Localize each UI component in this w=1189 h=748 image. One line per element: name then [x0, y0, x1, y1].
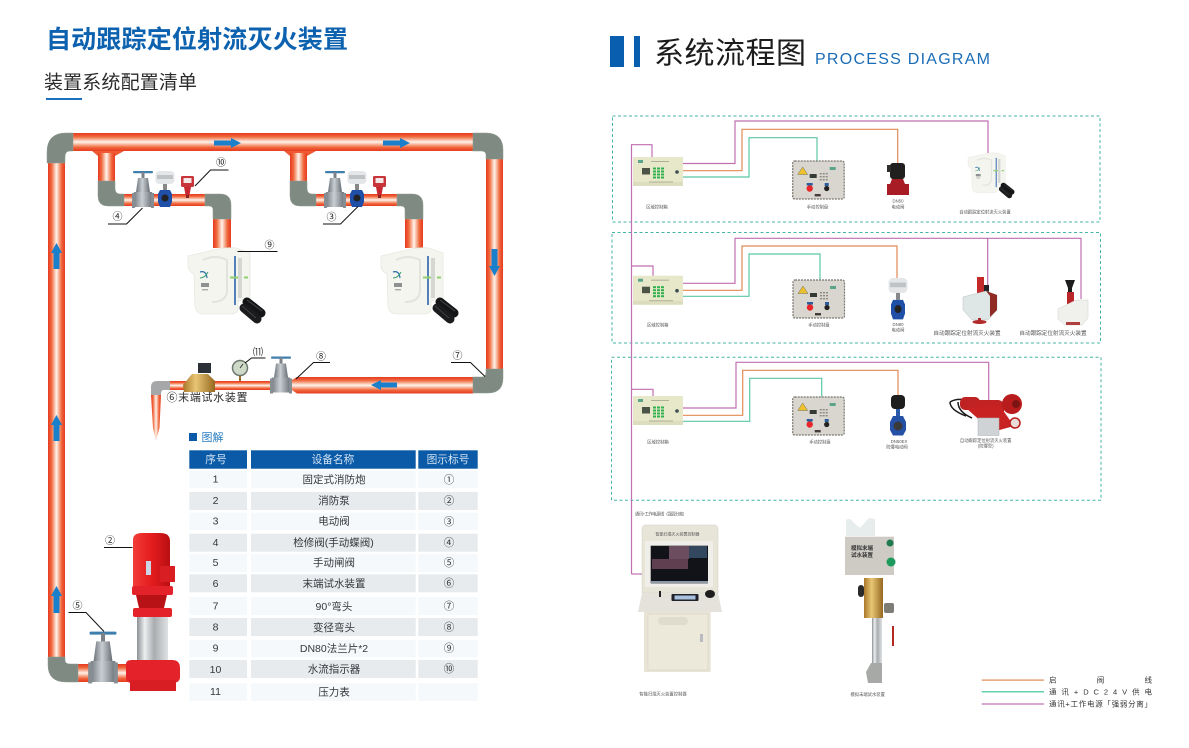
icon: DN50 electric valve	[887, 163, 909, 195]
row 6: 末端试水装置	[302, 577, 366, 590]
row 10: ⑩	[444, 663, 455, 675]
trunk line caption: 通讯+工作电源线（强弱分离）	[635, 510, 687, 518]
labels zone 3: 区域控制箱	[647, 438, 669, 446]
labels zone 2: 自动跟踪定位射流灭火装置	[933, 329, 1001, 337]
icon: manual control panel	[793, 280, 844, 318]
row 9: DN80法兰片*2	[300, 642, 368, 655]
labels zone 1: 手动控制盘	[807, 204, 829, 210]
wiring legend: 启阀线	[1049, 674, 1152, 684]
wiring legend: 通讯+DC24V供电	[1049, 686, 1152, 696]
row 5: 5	[213, 557, 219, 569]
row 1: 1	[213, 474, 219, 486]
leader lines and number labels: ⑤	[72, 600, 82, 612]
row 5: 手动闸阀	[313, 556, 355, 569]
row 11	[189, 683, 478, 701]
row 11: 压力表	[318, 686, 350, 698]
leader lines and number labels: ⑩	[216, 157, 226, 169]
labels zone 2: 手动控制盘	[808, 322, 830, 328]
row 4	[189, 534, 478, 552]
row 2: ②	[444, 495, 455, 507]
simulated end test water device	[845, 518, 896, 683]
icon: fire monitor left	[188, 248, 262, 319]
row 5	[189, 554, 478, 572]
labels zone 2: 自动跟踪定位射流灭火装置	[1019, 329, 1087, 337]
wiring zone 1	[683, 121, 988, 177]
labels zone 3: 手动控制盘	[809, 438, 831, 446]
row 7: 90°弯头	[316, 600, 352, 613]
icon: zone controller	[633, 396, 683, 425]
simulated end test water device: 模拟末端	[851, 544, 873, 552]
row 9: ⑨	[444, 642, 455, 654]
test device caption: 模拟末端试水装置	[851, 691, 886, 698]
wiring zone 3	[683, 362, 989, 421]
valve near pump	[88, 632, 118, 683]
row 2: 2	[213, 495, 219, 507]
heading: process diagram: PROCESS DIAGRAM	[815, 51, 990, 68]
main control cabinet: 智能扫描灭火装置控制器	[656, 530, 700, 536]
labels zone 3: (防爆型)	[978, 442, 994, 450]
icon: explosion-proof red monitor	[950, 394, 1022, 436]
row 4: 检修阀(手动蝶阀)	[293, 536, 374, 549]
pipe network diagram	[47, 133, 503, 691]
main pipe loop	[47, 133, 503, 682]
icon: zone controller	[633, 157, 683, 186]
leader lines and number labels: ④	[112, 211, 122, 223]
heading: process diagram	[610, 36, 990, 70]
branch with valves: left	[92, 151, 231, 248]
heading: process diagram: 系统流程图	[654, 38, 806, 70]
leader lines and number labels: ⑦	[452, 350, 462, 362]
leader lines and number labels: ⑥末端试水装置	[166, 390, 248, 404]
row 9	[189, 640, 478, 657]
row 9: 9	[213, 642, 219, 654]
row 1	[189, 471, 478, 488]
leader lines and number labels: ⑨	[264, 240, 274, 252]
labels zone 1: DN50	[892, 198, 904, 204]
row 1: 固定式消防炮	[302, 473, 366, 486]
row 7	[189, 597, 478, 615]
icon: fire monitor with grey housing	[963, 277, 997, 324]
main control cabinet	[638, 525, 722, 672]
labels zone 3: 自动跟踪定位射流灭火装置	[960, 437, 1012, 444]
labels zone 1	[646, 198, 1011, 216]
row 8: ⑧	[444, 622, 455, 634]
row 4: ④	[444, 537, 455, 549]
legend heading	[189, 430, 224, 444]
row 7: ⑦	[444, 600, 455, 612]
labels zone 1: 自动跟踪定位射流灭火装置	[959, 208, 1011, 216]
row 3: 3	[213, 516, 219, 528]
icon: auto tracking monitor	[968, 153, 1012, 196]
row 5: ⑤	[444, 557, 455, 569]
leader lines and number labels: ③	[326, 212, 336, 224]
row 8: 8	[213, 622, 219, 634]
leader lines and number labels: ②	[105, 535, 115, 547]
table header: 序号	[205, 453, 227, 466]
row 10: 10	[210, 664, 221, 676]
labels zone 3: 防爆电动阀	[886, 444, 908, 450]
row 8: 变径弯头	[313, 621, 355, 634]
subtitle: equipment list: 装置系统配置清单	[44, 72, 197, 94]
icon: fire monitor with white housing	[1058, 280, 1088, 325]
row 3: ③	[444, 516, 455, 528]
panel: zone 2	[612, 232, 1100, 343]
icon: manual control panel	[793, 161, 844, 199]
row 4: 4	[213, 537, 219, 549]
labels zone 3	[647, 437, 1012, 450]
wiring legend: 通讯+工作电源「强弱分离」	[1049, 698, 1152, 708]
fire pump	[126, 533, 180, 691]
leader lines and number labels	[68, 157, 485, 632]
row 6: 6	[213, 578, 219, 590]
row 6: ⑥	[444, 578, 455, 590]
leader lines and number labels: ⑧	[316, 351, 326, 363]
row 2	[189, 492, 478, 510]
table header: 设备名称	[312, 453, 355, 466]
row 3	[189, 513, 478, 530]
legend heading: 图解	[202, 430, 224, 444]
icon: zone controller	[633, 276, 683, 305]
leader lines and number labels: ⑾	[253, 346, 263, 358]
panel: zone 3	[612, 357, 1101, 500]
simulated end test water device: 试水装置	[851, 551, 873, 559]
row 7: 7	[213, 600, 219, 612]
labels zone 1: 电动阀	[892, 204, 904, 210]
wiring legend	[982, 674, 1152, 708]
icon: DN80 electric butterfly valve	[888, 278, 908, 319]
row 10	[189, 660, 478, 678]
row 11: 11	[210, 686, 221, 698]
icon: fire monitor right	[381, 248, 455, 319]
test water device: solenoid valve, gauge, gate valve	[183, 356, 292, 394]
row 10: 水流指示器	[308, 662, 361, 676]
row 3: 电动阀	[318, 514, 350, 528]
labels zone 2: DN80	[892, 322, 904, 327]
wiring zone 2	[683, 238, 1081, 299]
panel: zone 1	[612, 116, 1100, 222]
labels zone 1: 区域控制箱	[646, 204, 668, 210]
labels zone 2	[647, 322, 1087, 337]
icon: explosion-proof valve	[890, 395, 906, 436]
cabinet caption: 智能扫描灭火装置控制器	[639, 690, 687, 698]
table header	[189, 450, 478, 469]
table header: 图示标号	[427, 453, 469, 466]
equipment table	[189, 450, 478, 701]
row 6	[189, 574, 478, 592]
row 2: 消防泵	[318, 494, 350, 507]
flow arrows	[51, 138, 500, 613]
labels zone 3: DN50EX	[891, 439, 907, 444]
communication and power trunk line	[632, 145, 653, 574]
row 1: ①	[444, 474, 455, 486]
labels zone 2: 区域控制箱	[647, 322, 669, 328]
row 8	[189, 618, 478, 636]
icon: manual control panel	[793, 397, 844, 435]
page title: 自动跟踪定位射流灭火装置	[46, 25, 348, 54]
branch with valves: right	[284, 151, 423, 248]
labels zone 2: 电动阀	[892, 326, 904, 334]
